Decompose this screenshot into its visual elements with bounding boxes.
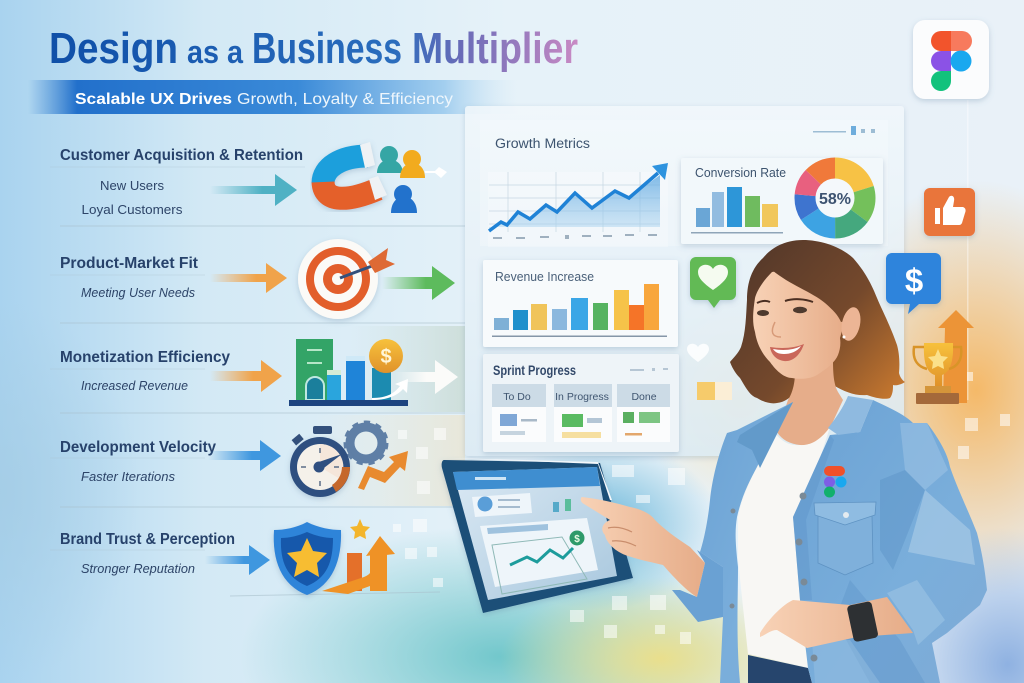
heading: brand trust: Brand Trust & Perception xyxy=(60,531,235,548)
text: loyal customers: Loyal Customers xyxy=(82,202,183,217)
text: increased revenue: Increased Revenue xyxy=(81,379,188,393)
donut value xyxy=(816,179,854,217)
column: to do: To Do xyxy=(503,391,531,403)
wristwatch xyxy=(847,601,879,642)
jacket shading facets xyxy=(793,423,975,683)
donut value: 58% xyxy=(819,191,851,208)
pointing forearm and hand xyxy=(581,497,705,597)
donut chart: 58% xyxy=(805,168,865,228)
column: to do xyxy=(492,384,546,442)
illustration: woman presenter xyxy=(581,240,987,683)
row 2: product-market fit xyxy=(60,239,455,319)
icon: gear xyxy=(346,423,386,463)
icon: magnet xyxy=(323,142,387,200)
floating squares xyxy=(393,372,1010,644)
icon: orange growth arrow xyxy=(358,451,408,490)
heading: customer acquisition: Customer Acquisition & Retention xyxy=(60,147,303,164)
title: as a xyxy=(187,34,243,70)
icon: stopwatch xyxy=(290,426,350,497)
heading: conversion rate: Conversion Rate xyxy=(695,166,786,180)
brows and eyes xyxy=(757,299,813,316)
icon: users xyxy=(377,146,447,213)
card: revenue increase xyxy=(483,260,678,347)
toolbar glyphs xyxy=(813,126,875,135)
jacket right panel and sleeve xyxy=(793,400,987,683)
icon: rising bars and arrow xyxy=(322,519,395,594)
icon: revenue chart: $ xyxy=(380,346,392,368)
neck and chest xyxy=(777,360,843,445)
face xyxy=(753,271,845,379)
heading: development velocity: Development Velocity xyxy=(60,439,216,456)
tablet xyxy=(442,458,633,613)
nose xyxy=(772,322,781,337)
smile xyxy=(770,344,804,361)
jacket pocket xyxy=(814,502,876,575)
toolbar glyphs xyxy=(630,368,668,371)
arrow: orange xyxy=(210,263,287,293)
jeans xyxy=(748,655,812,683)
icon: thumbs up xyxy=(924,188,975,236)
resting hand and forearm xyxy=(760,597,913,648)
small squares near hair xyxy=(697,382,732,400)
title: Design xyxy=(49,24,178,73)
heading: sprint progress: Sprint Progress xyxy=(493,363,576,378)
arrow: white xyxy=(395,360,458,394)
arrow: blue xyxy=(208,440,281,471)
right collar xyxy=(828,396,873,435)
arrow: blue xyxy=(205,545,270,575)
line chart: growth xyxy=(488,163,668,247)
subtitle banner: Scalable UX Drives xyxy=(75,91,232,108)
icon: Figma logo tile xyxy=(913,20,989,99)
row dividers xyxy=(50,167,465,596)
left cuff xyxy=(672,550,723,622)
panel: dashboard xyxy=(393,106,1010,683)
icon: revenue chart xyxy=(289,339,408,406)
column: in progress: In Progress xyxy=(555,391,609,403)
jacket left panel xyxy=(700,402,793,683)
text: meeting user needs: Meeting User Needs xyxy=(81,286,195,300)
card: sprint progress xyxy=(483,354,679,452)
column: done: Done xyxy=(631,391,657,403)
bar chart: conversion xyxy=(691,187,783,234)
icon: figma badge xyxy=(824,466,846,498)
icon: shield xyxy=(274,522,341,595)
left collar xyxy=(737,402,793,468)
hair fringe xyxy=(765,241,876,322)
subtitle banner: Growth, Loyalty & Efficiency xyxy=(237,91,453,108)
column: in progress xyxy=(554,384,612,442)
hair back xyxy=(730,240,905,403)
column: done xyxy=(617,384,670,442)
heading: monetization: Monetization Efficiency xyxy=(60,349,230,366)
small white heart xyxy=(687,344,709,362)
jacket buttons xyxy=(730,492,818,662)
arrow: green xyxy=(382,266,455,300)
title: Multiplier xyxy=(412,24,578,73)
icon: dollar bubble xyxy=(886,253,941,314)
heading: revenue increase: Revenue Increase xyxy=(495,270,594,284)
text: new users: New Users xyxy=(100,178,164,193)
row 5: brand trust and perception xyxy=(60,519,395,595)
heading: product-market fit: Product-Market Fit xyxy=(60,255,198,272)
text: faster iterations: Faster Iterations xyxy=(81,470,175,484)
arrow: teal xyxy=(210,174,297,206)
bar chart: revenue xyxy=(492,284,667,337)
subtitle banner xyxy=(28,80,518,114)
row 4: development velocity xyxy=(60,423,408,497)
title: Business xyxy=(252,24,402,73)
heading: growth metrics: Growth Metrics xyxy=(495,136,590,151)
ear xyxy=(839,306,863,342)
icon: target xyxy=(298,239,395,319)
right cuff xyxy=(887,580,945,645)
icon: heart bubble xyxy=(690,257,736,308)
card: conversion rate xyxy=(681,158,883,244)
icon: dollar bubble: $ xyxy=(905,262,923,299)
icon: growth arrow and trophy xyxy=(914,310,974,404)
title xyxy=(49,24,578,73)
arrow: orange xyxy=(210,360,282,392)
row 1: customer acquisition and retention xyxy=(60,142,447,217)
row 3: monetization efficiency xyxy=(60,339,458,406)
tablet: $ xyxy=(574,534,580,545)
text: stronger reputation: Stronger Reputation xyxy=(81,562,195,576)
t-shirt xyxy=(738,427,830,668)
